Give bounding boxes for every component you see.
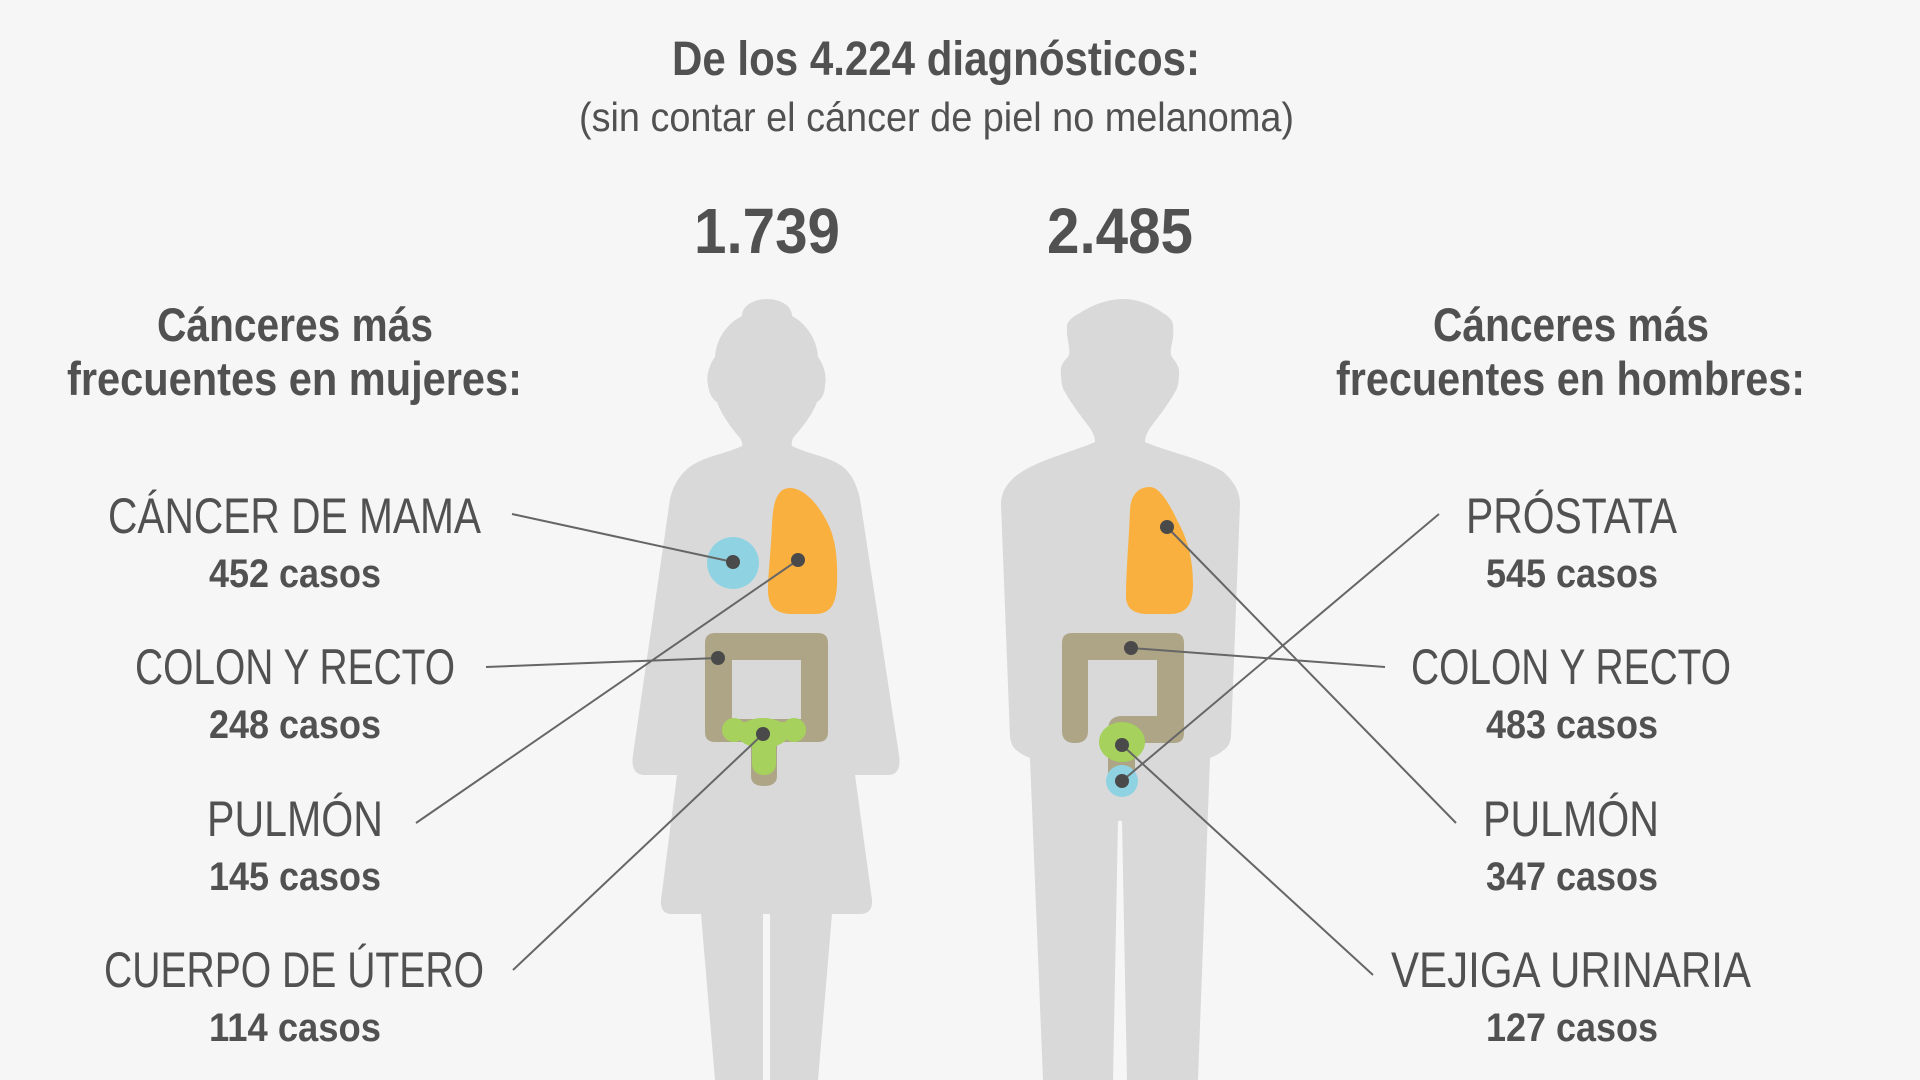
label: colon men — [1411, 639, 1731, 747]
organ: bladder (green) — [1099, 722, 1145, 762]
label: prostate men: PRÓSTATA — [1466, 488, 1678, 544]
heading: men — [1336, 298, 1805, 405]
organ: breast (blue) — [707, 537, 759, 589]
women total: 1.739 — [694, 195, 840, 267]
callout line: colon — [1131, 648, 1385, 667]
silhouette: woman — [632, 299, 900, 1080]
label: lung women — [207, 791, 383, 899]
heading: men: Cánceres más — [1433, 298, 1709, 351]
silhouette: man — [1001, 299, 1240, 1080]
callout line: prostate — [1122, 514, 1439, 781]
men total: 2.485 — [1047, 195, 1193, 267]
organ: colon (tan) — [705, 633, 828, 786]
label: colon women — [135, 639, 455, 747]
label: colon women: 248 casos — [209, 703, 381, 747]
callout line: colon — [486, 658, 718, 667]
organ: colon (tan) — [1062, 633, 1184, 790]
label: uterus women — [104, 942, 484, 1050]
woman figure — [416, 299, 900, 1080]
callout line: bladder — [1122, 745, 1373, 975]
label: breast cancer women — [108, 488, 482, 596]
callout line: breast — [512, 514, 733, 562]
label: bladder men: VEJIGA URINARIA — [1391, 942, 1752, 998]
label: colon women: COLON Y RECTO — [135, 639, 455, 695]
heading: women: frecuentes en mujeres: — [67, 352, 522, 405]
organ: lung (orange) — [1126, 487, 1193, 614]
organ: uterus (green) — [722, 718, 806, 775]
label: prostate men — [1466, 488, 1678, 596]
label: colon men: 483 casos — [1486, 703, 1658, 747]
label: lung men: 347 casos — [1486, 855, 1658, 899]
label: uterus women: CUERPO DE ÚTERO — [104, 942, 484, 998]
heading: women — [67, 298, 522, 405]
heading: women: Cánceres más — [157, 298, 433, 351]
organ: lung (orange) — [768, 488, 837, 614]
heading: men: frecuentes en hombres: — [1336, 352, 1805, 405]
label: bladder men — [1391, 942, 1752, 1050]
label: lung men: PULMÓN — [1483, 791, 1659, 847]
organ: prostate (blue) — [1106, 765, 1138, 797]
label: lung women: 145 casos — [209, 855, 381, 899]
markers: woman — [711, 553, 805, 741]
man figure — [1001, 299, 1456, 1080]
label: lung women: PULMÓN — [207, 791, 383, 847]
label: prostate men: 545 casos — [1486, 552, 1658, 596]
callout line: lung — [416, 560, 798, 823]
label: lung men — [1483, 791, 1659, 899]
label: breast cancer women: CÁNCER DE MAMA — [108, 488, 482, 544]
callout line: lung — [1167, 527, 1456, 823]
label: bladder men: 127 casos — [1486, 1006, 1658, 1050]
subtitle: (sin contar el cáncer de piel no melanoma) — [579, 94, 1294, 140]
title: De los 4.224 diagnósticos: — [672, 33, 1200, 86]
label: uterus women: 114 casos — [209, 1006, 381, 1050]
markers: man — [1115, 520, 1174, 788]
label: breast cancer women: 452 casos — [209, 552, 381, 596]
callout line: uterus — [513, 734, 763, 970]
label: colon men: COLON Y RECTO — [1411, 639, 1731, 695]
